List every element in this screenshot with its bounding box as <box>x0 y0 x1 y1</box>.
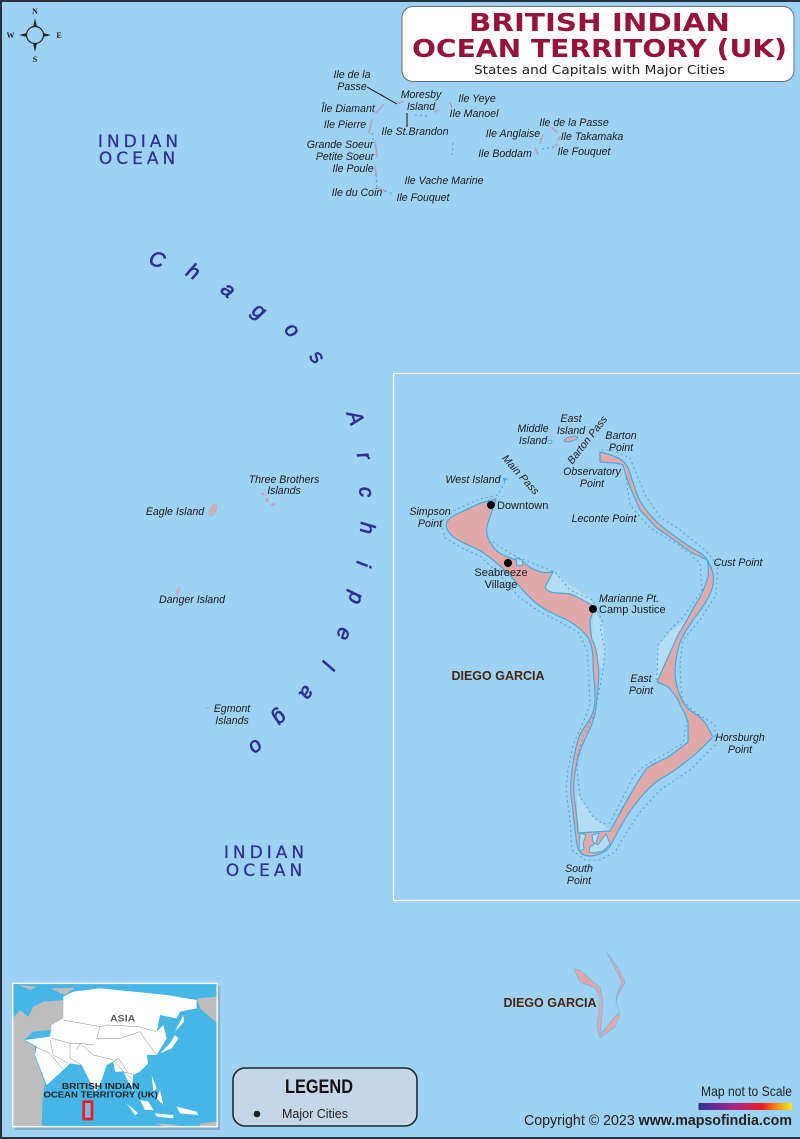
place labels: South <box>565 863 593 875</box>
West Island <box>503 478 508 482</box>
place labels: East <box>630 673 653 685</box>
place labels: Middle <box>517 423 549 435</box>
legend heading: LEGEND <box>285 1077 353 1098</box>
place labels: Point <box>629 685 654 697</box>
small lake <box>516 558 523 566</box>
place labels <box>409 413 765 887</box>
island labels: Ile du Coin <box>332 187 382 199</box>
city: Seabreeze Village: Seabreeze <box>474 567 528 579</box>
island labels: Ile St.Brandon <box>381 126 449 138</box>
island labels: Ile Takamaka <box>561 131 623 143</box>
western islands <box>146 474 320 727</box>
island labels: Ile Anglaise <box>486 128 540 140</box>
city: Camp Justice: Camp Justice <box>599 604 666 616</box>
curved label: Chagos Archipelago: h <box>355 521 379 535</box>
island labels: Ile Fouquet <box>396 192 451 204</box>
locator outline: Diego Garcia: DIEGO GARCIA <box>503 996 597 1010</box>
northern atoll: Peros Banhos islets <box>307 69 623 204</box>
legend item: major cities: Major Cities <box>282 1107 348 1121</box>
curved label: Chagos Archipelago: g <box>248 298 271 324</box>
label territory: OCEAN TERRITORY (UK) <box>43 1091 158 1100</box>
curved label: Chagos Archipelago: a <box>216 277 240 303</box>
label territory: BRITISH INDIAN <box>62 1082 140 1091</box>
legend panel <box>233 1068 417 1126</box>
place labels: Marianne Pt. <box>599 593 659 605</box>
ocean label south <box>224 843 308 881</box>
curved label: Chagos Archipelago: g <box>268 706 292 730</box>
island labels: Ile de la Passe <box>539 117 609 129</box>
island labels: Ile Boddam <box>478 148 532 160</box>
place labels: Simpson <box>409 506 451 518</box>
ocean label north: INDIAN <box>98 132 182 152</box>
inset: Asia locator map <box>13 983 220 1130</box>
country borders <box>35 1020 157 1078</box>
island labels: Ile de la <box>333 69 371 81</box>
compass rose: W <box>6 31 14 40</box>
copyright: Copyright © 2023 www.mapsofindia.com <box>524 1113 792 1129</box>
place labels: Horsburgh <box>715 732 765 744</box>
place labels: Barton <box>605 430 637 442</box>
island labels: Petite Soeur <box>316 151 375 163</box>
island labels: Ile Poule <box>332 163 374 175</box>
island labels <box>307 69 623 204</box>
shallow lagoon <box>545 572 687 855</box>
land <box>446 452 713 856</box>
curved label: Chagos Archipelago: r <box>352 450 376 463</box>
island labels: Ile Fouquet <box>557 146 612 158</box>
locator outline: Diego Garcia <box>503 953 625 1038</box>
curved label: Chagos Archipelago <box>146 247 379 760</box>
legend item: major cities <box>254 1107 348 1121</box>
curved label: Chagos Archipelago: e <box>331 625 357 643</box>
place labels: East <box>560 413 583 425</box>
place labels: Point <box>567 875 592 887</box>
place labels: Point <box>418 518 443 530</box>
Egmont <box>205 708 210 709</box>
place labels: Point <box>728 744 753 756</box>
curved label: Chagos Archipelago: o <box>244 734 268 760</box>
place labels: Point <box>609 442 634 454</box>
place labels: Leconte Point <box>572 513 637 525</box>
city: Seabreeze Village: Village <box>485 579 517 591</box>
curved label: Chagos Archipelago: h <box>182 259 204 285</box>
curved label: Chagos Archipelago: i <box>351 560 375 570</box>
label territory <box>44 1083 158 1099</box>
island labels: Moresby <box>401 89 442 101</box>
western islands: Three Brothers <box>249 474 320 486</box>
city: Seabreeze Village <box>474 559 528 591</box>
inset frame: Diego Garcia <box>394 374 800 900</box>
island labels: Ile Manoel <box>450 108 499 120</box>
map: Diego Garcia atoll <box>409 413 765 887</box>
place labels: Island <box>557 425 586 437</box>
place labels: Main Pass <box>499 453 542 498</box>
Danger Island <box>175 587 181 595</box>
southern lagoon <box>579 833 610 853</box>
compass rose <box>6 7 62 64</box>
island labels: Ile Vache Marine <box>404 175 484 187</box>
curved label: Chagos Archipelago: C <box>146 247 169 274</box>
label ASIA: ASIA <box>110 1014 136 1024</box>
place labels: West Island <box>445 474 502 486</box>
place labels: Barton Pass <box>565 413 611 467</box>
curved label: Chagos Archipelago: s <box>305 346 330 369</box>
leader lines <box>367 87 407 127</box>
Middle Island <box>548 440 552 444</box>
island labels: Grande Soeur <box>307 139 374 151</box>
ocean label north: OCEAN <box>99 149 179 169</box>
outer reef <box>441 450 718 860</box>
place labels: Cust Point <box>714 557 763 569</box>
curved label: Chagos Archipelago: p <box>343 588 369 607</box>
inner reef <box>490 478 702 824</box>
subtitle: States and Capitals with Major Cities <box>474 62 725 77</box>
grey landmass <box>13 985 217 1127</box>
place labels: Observatory <box>563 466 622 478</box>
curved label: Chagos Archipelago: a <box>294 682 320 704</box>
title panel <box>402 6 794 82</box>
locator marker <box>84 1102 92 1119</box>
curved label: Chagos Archipelago: c <box>354 486 378 499</box>
compass rose: E <box>56 31 62 40</box>
ocean label south: INDIAN <box>224 843 308 863</box>
island labels: Île Diamant <box>321 102 376 115</box>
ocean label north <box>98 132 182 169</box>
white Asia <box>25 988 197 1098</box>
title: OCEAN TERRITORY (UK) <box>412 34 787 63</box>
compass rose: N <box>32 7 38 16</box>
compass rose: S <box>33 55 38 64</box>
island labels: Ile Pierre <box>324 119 366 131</box>
island labels: Ile Yeye <box>458 93 496 105</box>
title: BRITISH INDIAN <box>469 8 730 37</box>
scale colour bar <box>698 1103 792 1110</box>
Eagle Island <box>208 503 218 517</box>
western islands: Egmont <box>214 703 251 715</box>
ocean label south: OCEAN <box>226 861 306 881</box>
island labels: Passe <box>337 81 367 93</box>
western islands: Danger Island <box>159 594 226 606</box>
East Island <box>564 435 578 443</box>
city: Downtown: Downtown <box>497 500 548 512</box>
place labels: Island <box>519 435 548 447</box>
white archipelagos <box>127 1015 198 1118</box>
island labels: Island <box>407 101 436 113</box>
curved label: Chagos Archipelago: A <box>341 406 368 429</box>
title <box>412 8 787 63</box>
curved label: Chagos Archipelago: l <box>316 657 339 674</box>
place labels: Point <box>580 478 605 490</box>
western islands: Eagle Island <box>146 506 205 518</box>
western islands: Islands <box>215 715 249 727</box>
Three Brothers <box>261 493 275 506</box>
curved label: Chagos Archipelago: o <box>280 318 304 342</box>
western islands: Islands <box>267 485 301 497</box>
heading: Diego Garcia: DIEGO GARCIA <box>451 669 545 683</box>
